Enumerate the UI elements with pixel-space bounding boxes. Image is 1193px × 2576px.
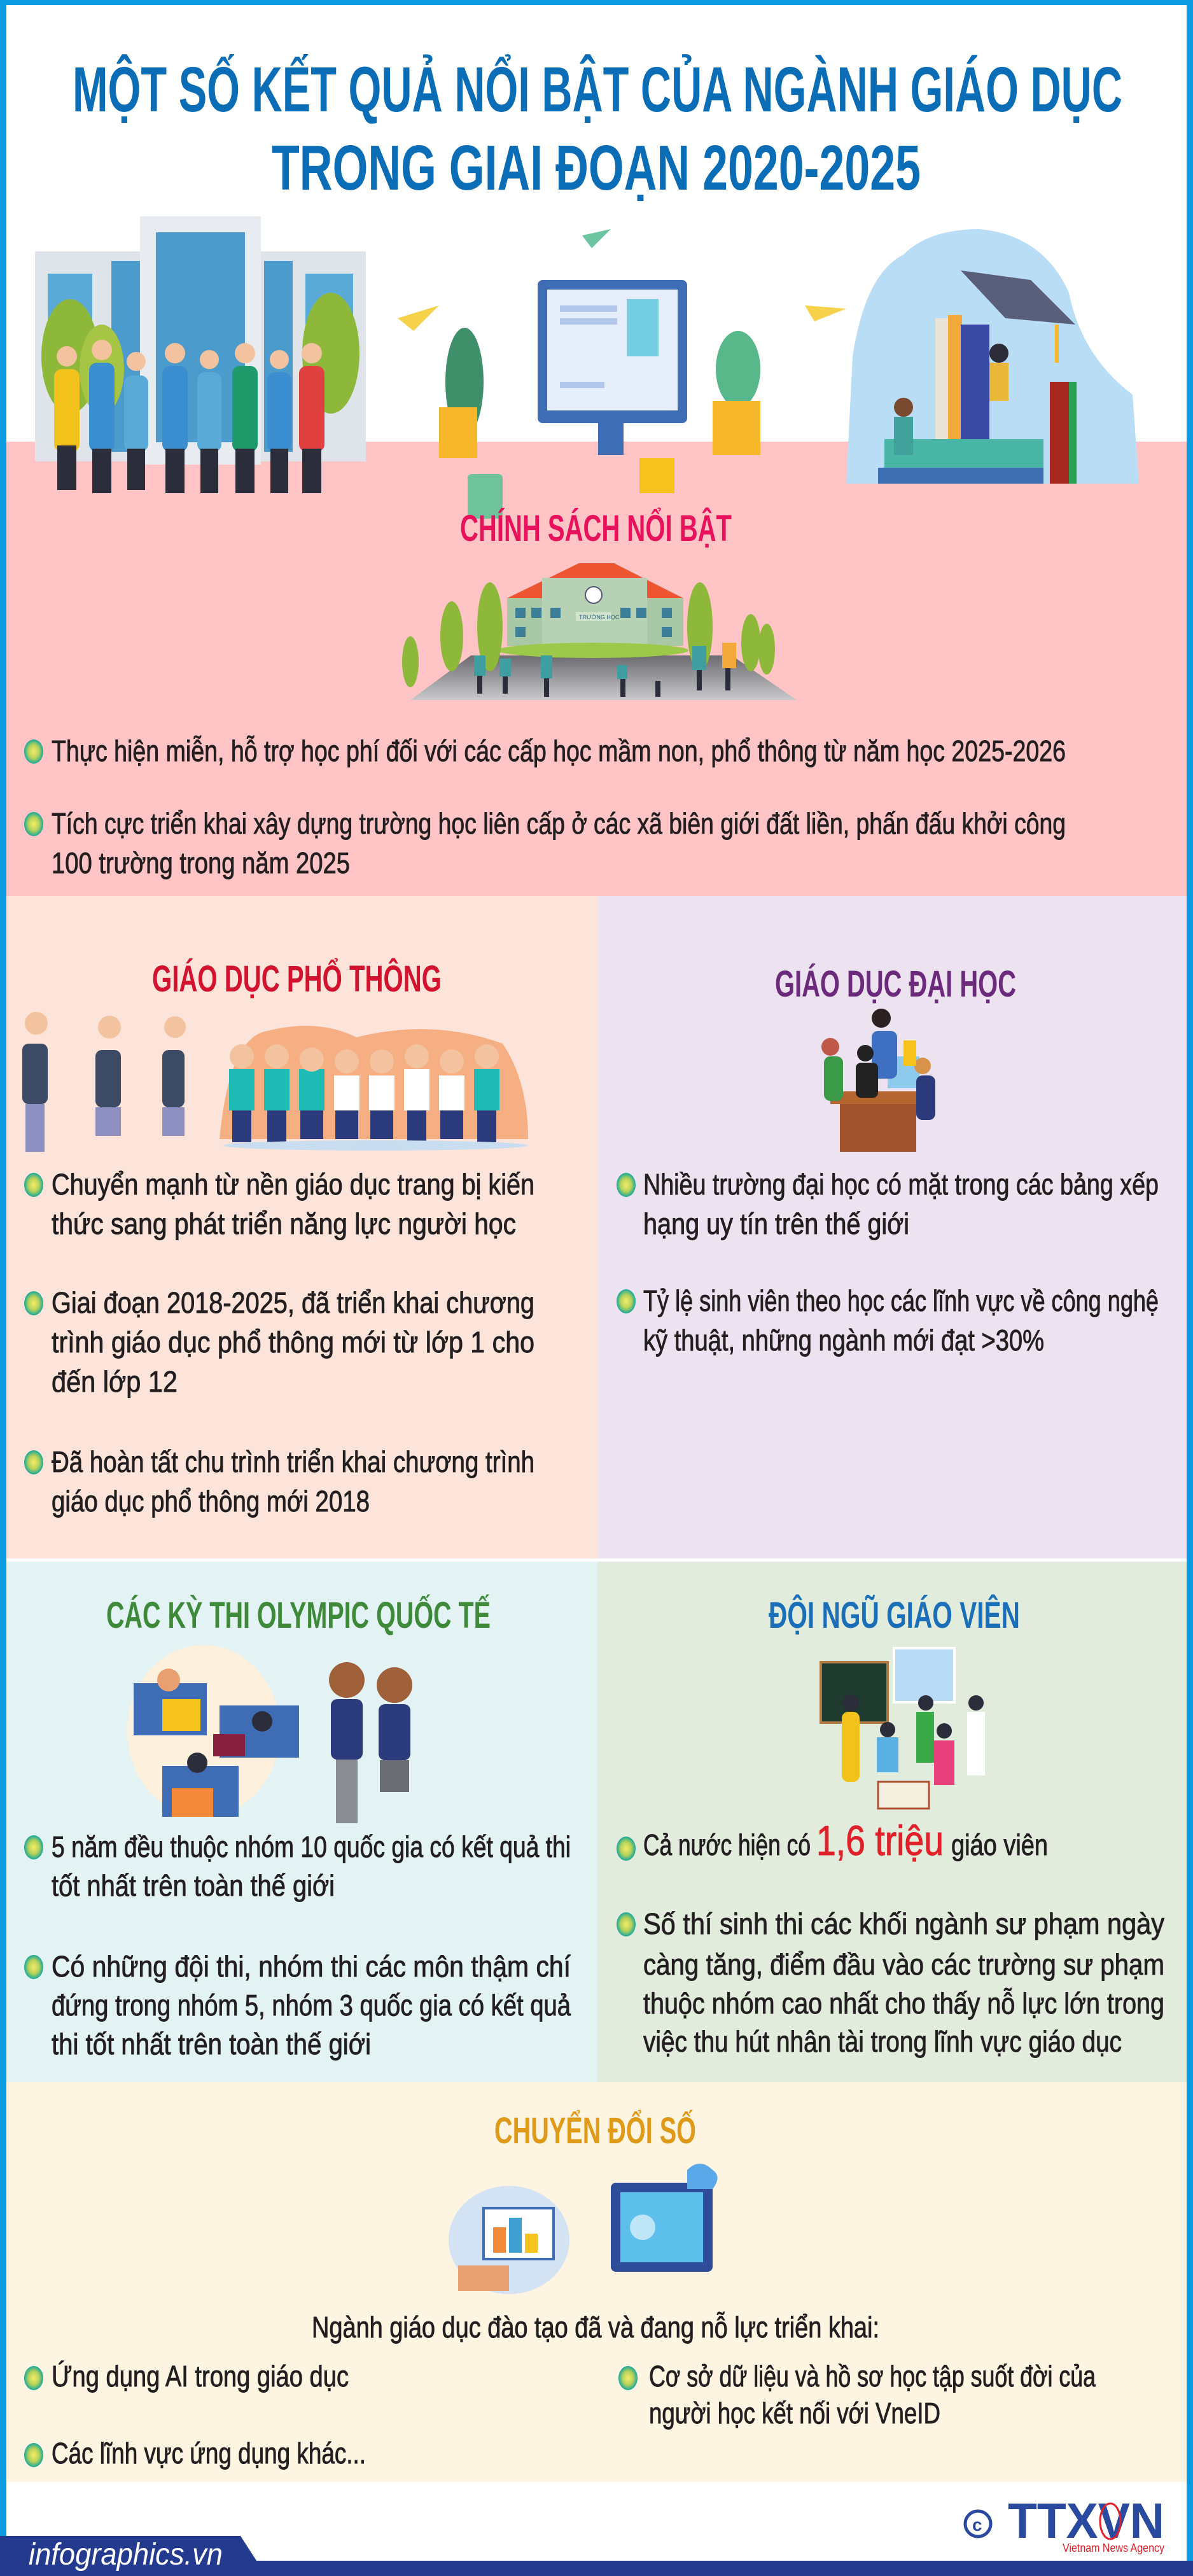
illustration: digital — [449, 2164, 718, 2294]
bullets: olympic: thi tốt nhất trên toàn thế giới — [52, 2027, 371, 2061]
logo: TTXVN: TTXVN — [1008, 2493, 1164, 2549]
bullets: giáo dục phổ thông: Chuyển mạnh từ nền giáo dục trang bị kiến — [52, 1168, 534, 1201]
bullets: olympic: tốt nhất trên toàn thế giới — [52, 1869, 335, 1902]
heading: giáo dục phổ thông: GIÁO DỤC PHỔ THÔNG — [152, 958, 442, 1000]
bullets: giáo dục phổ thông — [24, 1168, 534, 1518]
illustration: university students — [821, 1009, 935, 1152]
bullets: giáo viên: 1,6 triệu — [816, 1817, 944, 1864]
bullets: giáo dục đại học: hạng uy tín trên thế giới — [643, 1207, 909, 1240]
heading: olympic: CÁC KỲ THI OLYMPIC QUỐC TẾ — [106, 1595, 491, 1636]
bullets: chính sách: 100 trường trong năm 2025 — [52, 846, 350, 879]
illustration: olympic — [127, 1645, 412, 1823]
bullets: olympic: 5 năm đều thuộc nhóm 10 quốc gia có kết quả thi — [52, 1830, 571, 1863]
bullets: giáo dục phổ thông: trình giáo dục phổ thông mới từ lớp 1 cho — [52, 1326, 534, 1359]
intro text: chuyển đổi số: Ngành giáo dục đào tạo đã và đang nỗ lực triển khai: — [312, 2311, 879, 2344]
illustration: students — [22, 1012, 528, 1152]
bullets: giáo dục phổ thông: thức sang phát triển năng lực người học — [52, 1207, 516, 1240]
bullets: olympic: đứng trong nhóm 5, nhóm 3 quốc gia có kết quả — [52, 1989, 571, 2022]
illustration: school: TRƯỜNG HỌC — [579, 614, 620, 620]
bullets: giáo dục phổ thông: giáo dục phổ thông mới 2018 — [52, 1485, 370, 1518]
illustration: teachers — [821, 1648, 985, 1809]
illustration: school — [402, 563, 797, 700]
illustration: building and students — [35, 216, 366, 493]
title — [73, 53, 1122, 204]
bullets: giáo dục phổ thông: đến lớp 12 — [52, 1365, 178, 1398]
illustration: books and graduation cap — [846, 229, 1139, 484]
bullets: giáo viên: giáo viên — [951, 1828, 1048, 1861]
bullets: giáo dục phổ thông: Đã hoàn tất chu trình triển khai chương trình — [52, 1445, 534, 1478]
bullets: chuyển đổi số: Các lĩnh vực ứng dụng khác... — [52, 2437, 366, 2470]
logo: TTXVN: c — [972, 2515, 982, 2535]
bullets: giáo viên: Cả nước hiện có — [643, 1828, 811, 1861]
footer bar: infographics.vn — [0, 2536, 1193, 2576]
bullets: olympic — [24, 1830, 571, 2061]
bullets: giáo viên — [617, 1817, 1164, 2058]
bullets: chính sách — [24, 734, 1066, 879]
bullets: giáo dục phổ thông: Giai đoạn 2018-2025, đã triển khai chương — [52, 1286, 534, 1319]
heading: giáo dục đại học: GIÁO DỤC ĐẠI HỌC — [775, 963, 1016, 1005]
bullets: olympic: Có những đội thi, nhóm thi các môn thậm chí — [52, 1950, 571, 1983]
bullets: chuyển đổi số — [24, 2360, 1096, 2470]
heading: đội ngũ giáo viên: ĐỘI NGŨ GIÁO VIÊN — [769, 1595, 1020, 1636]
heading: chính sách nổi bật: CHÍNH SÁCH NỔI BẬT — [460, 508, 732, 549]
heading: chuyển đổi số: CHUYỂN ĐỔI SỐ — [494, 2110, 696, 2152]
logo: TTXVN: Vietnam News Agency — [1063, 2542, 1164, 2554]
bullets: giáo dục đại học — [617, 1168, 1159, 1357]
title: TRONG GIAI ĐOẠN 2020-2025 — [272, 132, 921, 204]
illustration: computer — [398, 229, 846, 519]
bullets: giáo dục đại học: kỹ thuật, những ngành mới đạt >30% — [643, 1324, 1044, 1357]
bullets: chuyển đổi số: Ứng dụng AI trong giáo dục — [52, 2360, 349, 2393]
bullets: chuyển đổi số: người học kết nối với VneID — [649, 2397, 940, 2430]
footer bar: infographics.vn: infographics.vn — [29, 2538, 223, 2572]
logo: TTXVN — [965, 2493, 1164, 2554]
